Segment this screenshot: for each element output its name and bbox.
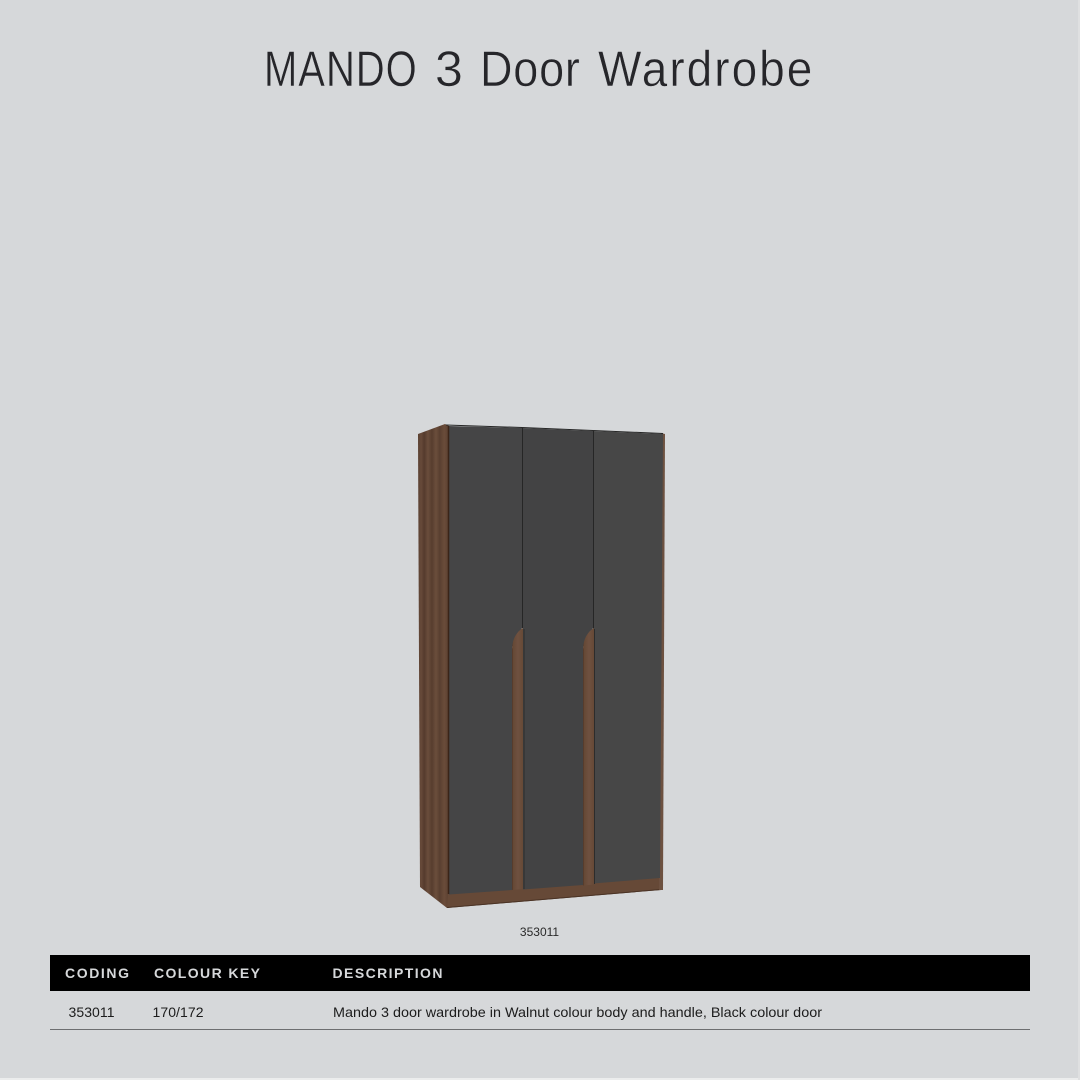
title: MANDO: [264, 41, 417, 97]
title: Wardrobe: [598, 42, 812, 97]
door: left: [448, 426, 522, 894]
right edge strip: [659, 433, 665, 890]
title: 3: [435, 41, 463, 97]
header: coding: CODING: [65, 965, 129, 981]
wardrobe product image: [418, 424, 665, 908]
header: description: DESCRIPTION: [332, 965, 442, 981]
cell: colour key: 170/172: [152, 1004, 204, 1020]
door: centre: [522, 428, 593, 890]
door: right: [593, 431, 663, 884]
table header bar: [50, 955, 1030, 991]
cell: description: Mando 3 door wardrobe in Walnut colour body and handle, Black colour door: [333, 1004, 822, 1020]
door shadow lines: [446, 425, 663, 894]
title: [264, 41, 812, 98]
handle: right: [583, 628, 594, 886]
table bottom rule: [50, 1029, 1030, 1030]
table: [50, 955, 1030, 1030]
header: colour key: COLOUR KEY: [154, 965, 261, 981]
wardrobe plinth: [447, 876, 661, 908]
wardrobe side panel: [418, 424, 449, 908]
title: Door: [480, 42, 580, 98]
handle: left: [512, 628, 523, 890]
cell: coding: 353011: [68, 1004, 115, 1020]
product code caption: 353011: [520, 925, 559, 939]
